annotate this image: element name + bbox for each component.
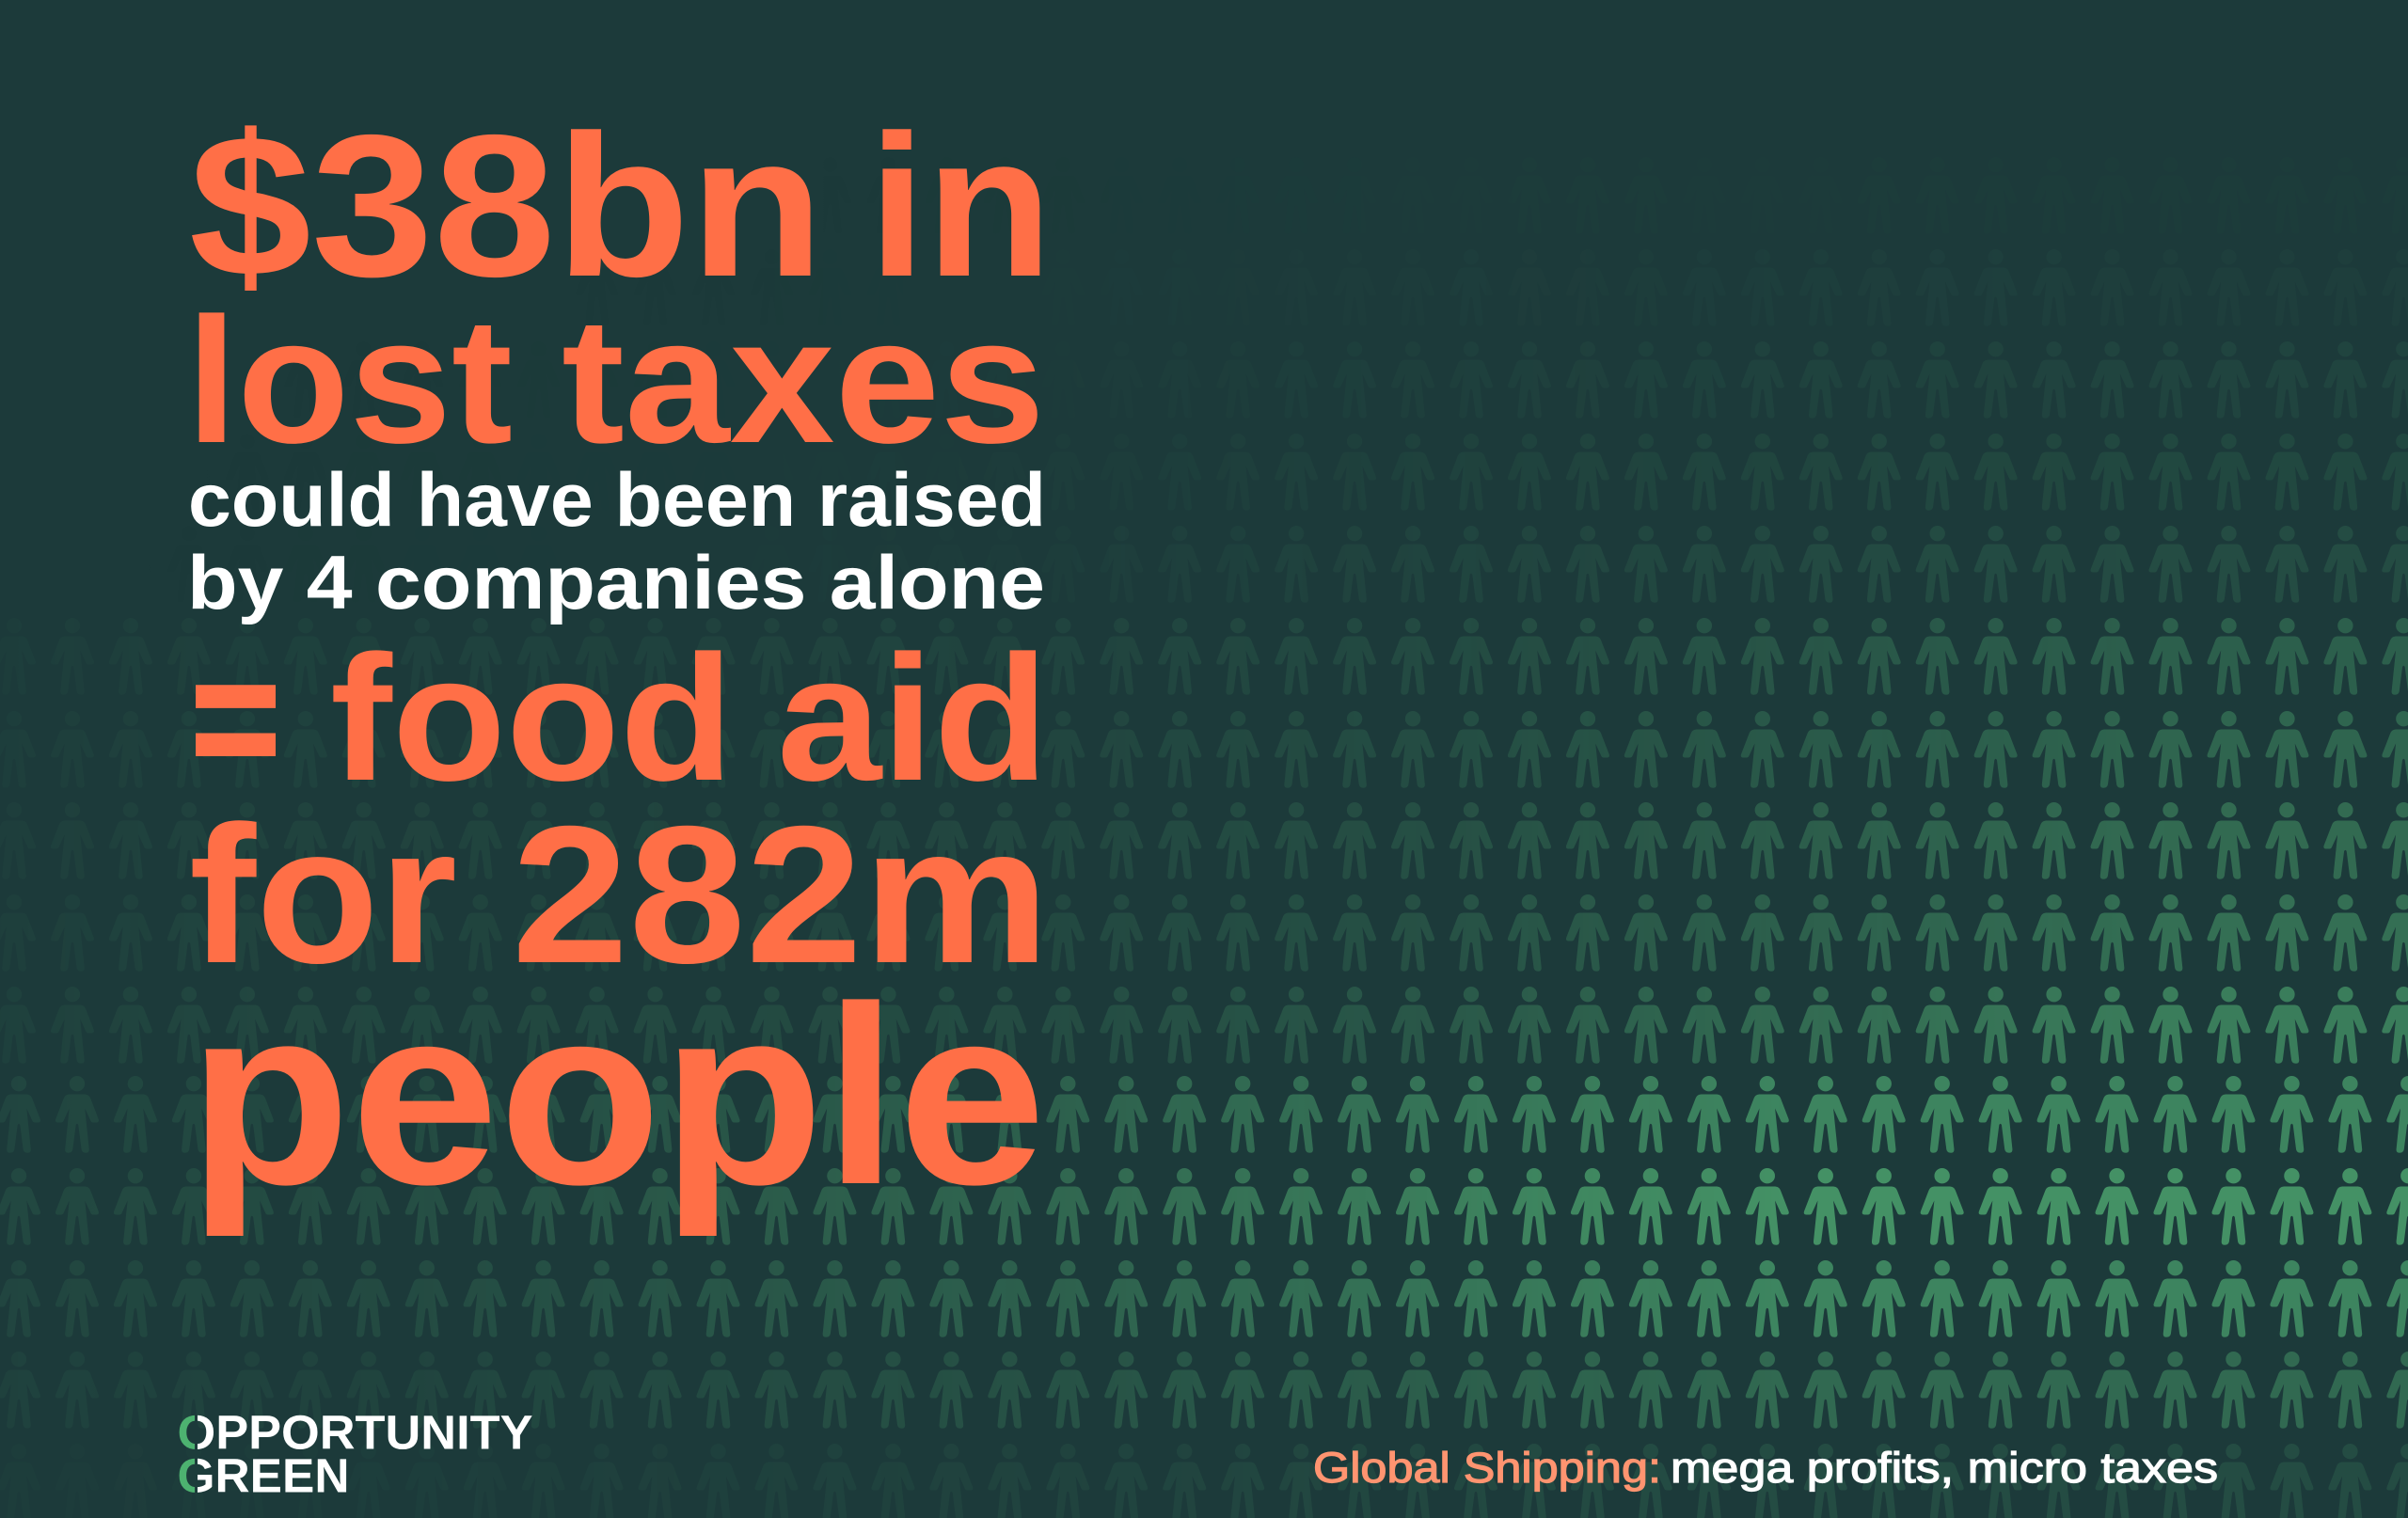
headline line: for 282m: 282m [512,786,1050,1004]
logo line: GREEN: GREEN [177,1448,350,1503]
headline line: = food aid [191,619,1049,818]
headline line: for 282m: for [189,786,457,1004]
headline block [186,92,1053,1239]
headline line: = food aid: food [330,619,734,818]
headline line: $38bn in: $38bn [189,92,824,319]
headline line: $38bn in [189,92,1053,319]
headline line: lost taxes: lost [186,281,513,481]
subhead: could have been raised: could have been raised [188,458,1046,543]
headline line: lost taxes: taxes [562,281,1045,481]
tagline: Global Shipping: Global Shipping: [1313,1444,1661,1492]
logo: Opportunity Green [177,1405,532,1503]
subhead: by 4 companies alone: by 4 companies alone [187,541,1045,625]
logo line: OPPORTUNITY: OPPORTUNITY [177,1405,532,1460]
headline line: = food aid: aid [777,619,1049,818]
headline line: for 282m [189,786,1050,1004]
tagline: mega profits, micro taxes: mega profits, micro taxes [1671,1444,2218,1492]
headline line: $38bn in: in [868,92,1053,319]
headline line: = food aid: = [191,619,280,818]
tagline [1313,1444,2218,1492]
icon grid: rows of people fading out [0,341,2408,1518]
headline line: people: people [188,955,1046,1239]
headline line: lost taxes [186,281,1045,481]
